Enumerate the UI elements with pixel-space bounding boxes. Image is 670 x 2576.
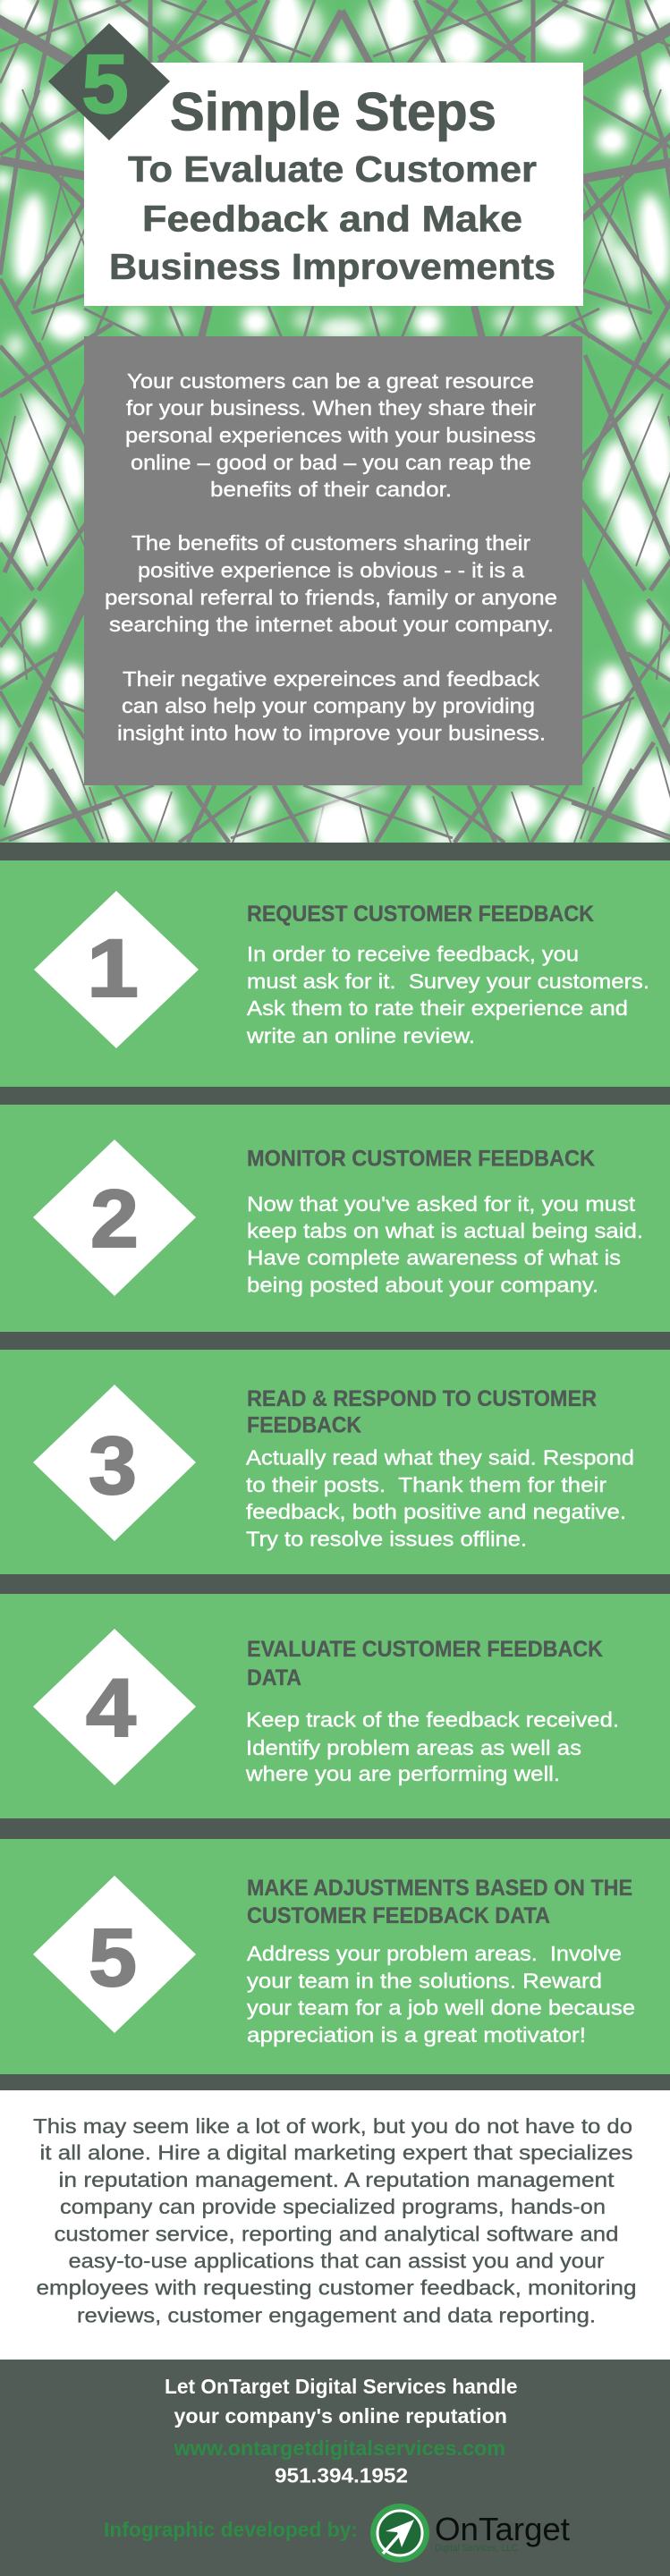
- heading: read and respond: FEEDBACK: [247, 1413, 361, 1438]
- panel: title card: [84, 63, 583, 306]
- call to action: your company's online reputation: [174, 2404, 507, 2428]
- heading: subtitle: Business Improvements: [109, 246, 556, 287]
- text block: intro paragraph 2: The benefits of customers sharing their: [131, 531, 530, 555]
- panel: step 3: [33, 1385, 634, 1551]
- heading: evaluate customer feedback data: EVALUATE CUSTOMER FEEDBACK: [247, 1637, 603, 1662]
- text block: intro paragraph 2: personal referral to friends, family or anyone: [105, 586, 557, 609]
- panel: step 4: [33, 1629, 619, 1785]
- panel: closing text: company can provide specialized programs, hands-on: [60, 2195, 606, 2218]
- text block: intro paragraph 3: can also help your company by providing: [122, 694, 535, 717]
- heading: evaluate customer feedback data: DATA: [247, 1665, 301, 1690]
- icon: number 3 diamond: 3: [89, 1420, 137, 1512]
- text block: step 4 body: Identify problem areas as well as: [246, 1736, 581, 1759]
- panel: step 5: [33, 1876, 635, 2046]
- text block: step 1 body: must ask for it. Survey your customers.: [247, 970, 649, 993]
- text block: step 5 body: your team for a job well done because: [247, 1996, 635, 2020]
- phone number: 951.394.1952: [275, 2463, 408, 2487]
- text block: step 2 body: Have complete awareness of what is: [247, 1246, 621, 1269]
- text block: step 3 body: feedback, both positive and negative.: [246, 1500, 626, 1523]
- text block: intro paragraph 2: positive experience is obvious - - it is a: [138, 558, 525, 581]
- panel: step 1: [34, 891, 649, 1048]
- text block: step 5 body: Address your problem areas. Involve: [247, 1942, 622, 1965]
- text block: step 1 body: write an online review.: [246, 1024, 475, 1047]
- heading: subtitle: To Evaluate Customer: [128, 148, 537, 190]
- text block: step 1 body: In order to receive feedback, you: [247, 943, 579, 966]
- icon: number 5 diamond: 5: [89, 1912, 137, 2004]
- text block: intro paragraph 2: searching the internet about your company.: [109, 613, 554, 636]
- icon: OnTarget logo mark: [370, 2504, 429, 2563]
- text block: step 4 body: where you are performing well.: [245, 1762, 560, 1785]
- icon: number 1 diamond: 1: [87, 923, 139, 1014]
- icon: number 5 diamond: [33, 1876, 196, 2033]
- text block: intro paragraph 1: Your customers can be a great resource: [127, 369, 534, 393]
- website link: www.ontargetdigitalservices.com: [173, 2436, 505, 2460]
- text block: step 2 body: Now that you've asked for it, you must: [247, 1192, 636, 1216]
- heading: make adjustments: CUSTOMER FEEDBACK DATA: [247, 1903, 550, 1928]
- text block: intro paragraph 1: for your business. When they share their: [126, 396, 536, 419]
- panel: closing text: customer service, reporting and analytical software and: [54, 2222, 619, 2245]
- text block: step 1 body: [246, 943, 649, 1047]
- heading: subtitle: [109, 148, 556, 287]
- heading: make adjustments: MAKE ADJUSTMENTS BASED ON THE: [247, 1876, 632, 1901]
- panel: closing text: This may seem like a lot of work, but you do not have to do: [33, 2114, 632, 2138]
- text block: intro paragraph 1: online – good or bad – you can reap the: [131, 451, 531, 474]
- text block: step 5 body: [247, 1942, 635, 2046]
- text block: step 5 body: your team in the solutions. Reward: [247, 1970, 602, 1993]
- text block: step 3 body: Actually read what they said. Respond: [246, 1445, 634, 1469]
- text block: step 1 body: Ask them to rate their experience and: [247, 996, 628, 1020]
- icon: number 4 diamond: 4: [86, 1663, 136, 1754]
- text block: intro paragraph 3: [117, 667, 546, 744]
- text block: intro paragraph 2: [105, 531, 557, 636]
- icon: number 3 diamond: [33, 1385, 196, 1541]
- icon: title number diamond: [48, 23, 170, 140]
- heading: read and respond: [247, 1386, 597, 1438]
- panel: steps background bands: [0, 843, 670, 2090]
- text block: intro paragraph 1: personal experiences with your business: [125, 424, 536, 447]
- icon: number 1 diamond: [34, 891, 199, 1048]
- heading: make adjustments: [247, 1876, 632, 1928]
- text block: step 4 body: Keep track of the feedback received.: [246, 1708, 619, 1732]
- text block: intro paragraph 3: insight into how to improve your business.: [117, 721, 546, 744]
- icon: title number diamond: 5: [81, 37, 129, 131]
- call to action: Let OnTarget Digital Services handle: [165, 2375, 517, 2398]
- call to action: [165, 2375, 517, 2428]
- heading: read and respond: READ & RESPOND TO CUSTOMER: [247, 1386, 597, 1411]
- logo wordmark: OnTarget: [435, 2511, 570, 2547]
- panel: closing text: easy-to-use applications that can assist you and your: [68, 2249, 605, 2272]
- panel: closing text: [0, 2090, 670, 2360]
- text block: intro paragraph 1: benefits of their candor.: [210, 478, 452, 501]
- panel: footer: [0, 2360, 670, 2576]
- heading: request customer feedback: REQUEST CUSTOMER FEEDBACK: [247, 902, 594, 927]
- heading: monitor customer feedback: MONITOR CUSTOMER FEEDBACK: [247, 1147, 595, 1172]
- text block: step 2 body: keep tabs on what is actual being said.: [247, 1219, 643, 1242]
- credit label: Infographic developed by:: [104, 2518, 358, 2541]
- icon: number 2 diamond: [33, 1140, 196, 1296]
- panel: step 2: [33, 1140, 643, 1297]
- icon: number 4 diamond: [33, 1629, 196, 1785]
- heading: Simple Steps: Simple Steps: [170, 82, 496, 141]
- text block: intro paragraph 1: [125, 369, 536, 501]
- text block: step 4 body: [245, 1708, 619, 1785]
- text block: intro paragraph 3: Their negative expereinces and feedback: [123, 667, 539, 691]
- heading: evaluate customer feedback data: [247, 1637, 603, 1690]
- text block: step 3 body: [246, 1445, 634, 1551]
- text block: step 3 body: Try to resolve issues offline.: [246, 1528, 527, 1551]
- panel: closing text: in reputation management. A reputation management: [59, 2168, 615, 2191]
- heading: subtitle: Feedback and Make: [142, 199, 522, 240]
- panel: closing text: reviews, customer engagement and data reporting.: [77, 2304, 596, 2327]
- panel: patterned hero background: [0, 0, 670, 851]
- icon: number 2 diamond: 2: [90, 1174, 139, 1265]
- panel: closing text: employees with requesting customer feedback, monitoring: [36, 2275, 636, 2299]
- logo wordmark: Digital Services, LLC: [435, 2543, 518, 2554]
- text block: step 2 body: [247, 1192, 643, 1297]
- panel: introduction: [84, 336, 582, 785]
- text block: step 3 body: to their posts. Thank them for their: [246, 1473, 606, 1496]
- text block: step 5 body: appreciation is a great motivator!: [247, 2023, 586, 2046]
- text block: step 2 body: being posted about your company.: [247, 1274, 598, 1297]
- panel: closing text: it all alone. Hire a digital marketing expert that specializes: [39, 2141, 633, 2165]
